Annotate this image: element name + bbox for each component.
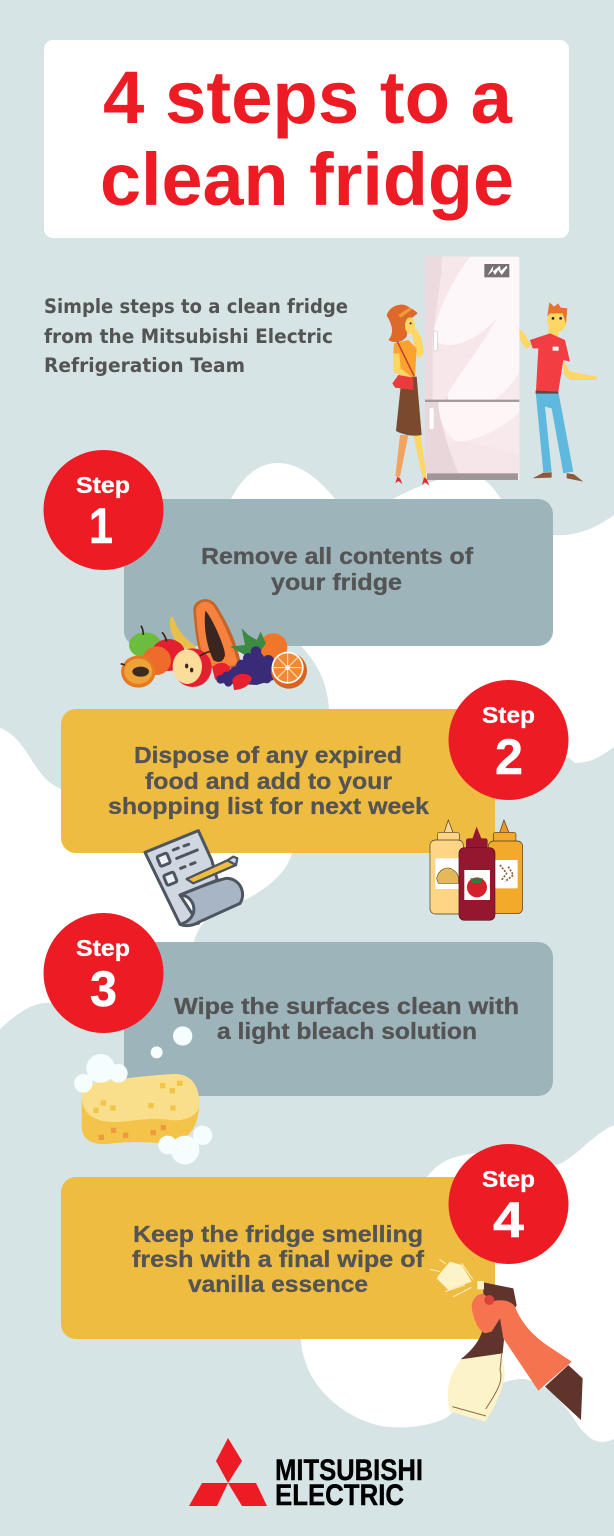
step 1 text: your fridge <box>271 569 402 595</box>
step 4 text: vanilla essence <box>188 1271 368 1297</box>
fridge <box>425 257 519 480</box>
step 3 panel <box>124 942 553 1096</box>
step 3 text: a light bleach solution <box>217 1018 477 1044</box>
step 1 text: Remove all contents of <box>201 543 473 569</box>
icon: soapy sponge <box>74 1026 212 1164</box>
intro text: Simple steps to a clean fridge <box>44 295 348 318</box>
step 4 text: fresh with a final wipe of <box>132 1246 424 1272</box>
step 2 text: shopping list for next week <box>108 793 429 819</box>
step 1 panel <box>124 499 553 646</box>
step 2 panel <box>61 709 495 853</box>
step 3 text <box>174 993 519 1044</box>
step 1 badge: Step <box>76 472 130 498</box>
icon: hand with spray bottle <box>430 1259 583 1422</box>
step 3 badge: Step <box>76 935 130 961</box>
middle bottle <box>459 827 495 920</box>
step 2 badge: 2 <box>495 729 523 785</box>
right bottle <box>488 820 523 914</box>
step 3 badge <box>44 913 164 1033</box>
icon: fruit pile <box>121 599 307 690</box>
intro text <box>44 295 348 377</box>
step 2 badge: Step <box>482 702 535 728</box>
step 2 text <box>108 742 429 819</box>
intro text: from the Mitsubishi Electric <box>44 325 333 348</box>
man <box>519 302 597 482</box>
logo mark <box>189 1438 267 1506</box>
step 3 text: Wipe the surfaces clean with <box>174 993 519 1019</box>
step 1 badge: 1 <box>89 498 113 554</box>
step 1 badge <box>44 450 164 570</box>
intro text: Refrigeration Team <box>44 354 245 377</box>
icon: shopping checklist <box>145 831 243 926</box>
step 4 badge: Step <box>482 1166 535 1192</box>
step 3 badge: 3 <box>90 961 117 1017</box>
logo wordmark <box>275 1454 423 1512</box>
title <box>100 56 514 221</box>
logo: Mitsubishi Electric <box>189 1438 423 1512</box>
left bottle <box>430 820 463 914</box>
icon: condiment bottles <box>430 820 523 920</box>
step 4 text <box>132 1221 424 1297</box>
step 2 text: Dispose of any expired <box>134 742 402 768</box>
step 4 badge <box>448 1144 568 1264</box>
background white blobs <box>0 463 614 1442</box>
logo wordmark: MITSUBISHI <box>275 1454 423 1487</box>
illustration: fridge with two people <box>387 257 597 486</box>
step 2 badge <box>448 680 568 800</box>
step 1 text <box>201 543 473 595</box>
step 4 panel <box>61 1177 495 1339</box>
step 4 badge: 4 <box>493 1192 524 1248</box>
title: clean fridge <box>100 138 514 221</box>
woman <box>387 305 429 486</box>
title: 4 steps to a <box>103 56 513 139</box>
logo wordmark: ELECTRIC <box>275 1479 404 1512</box>
title panel <box>44 40 569 238</box>
step 2 text: food and add to your <box>145 768 392 794</box>
step 4 text: Keep the fridge smelling <box>133 1221 423 1247</box>
